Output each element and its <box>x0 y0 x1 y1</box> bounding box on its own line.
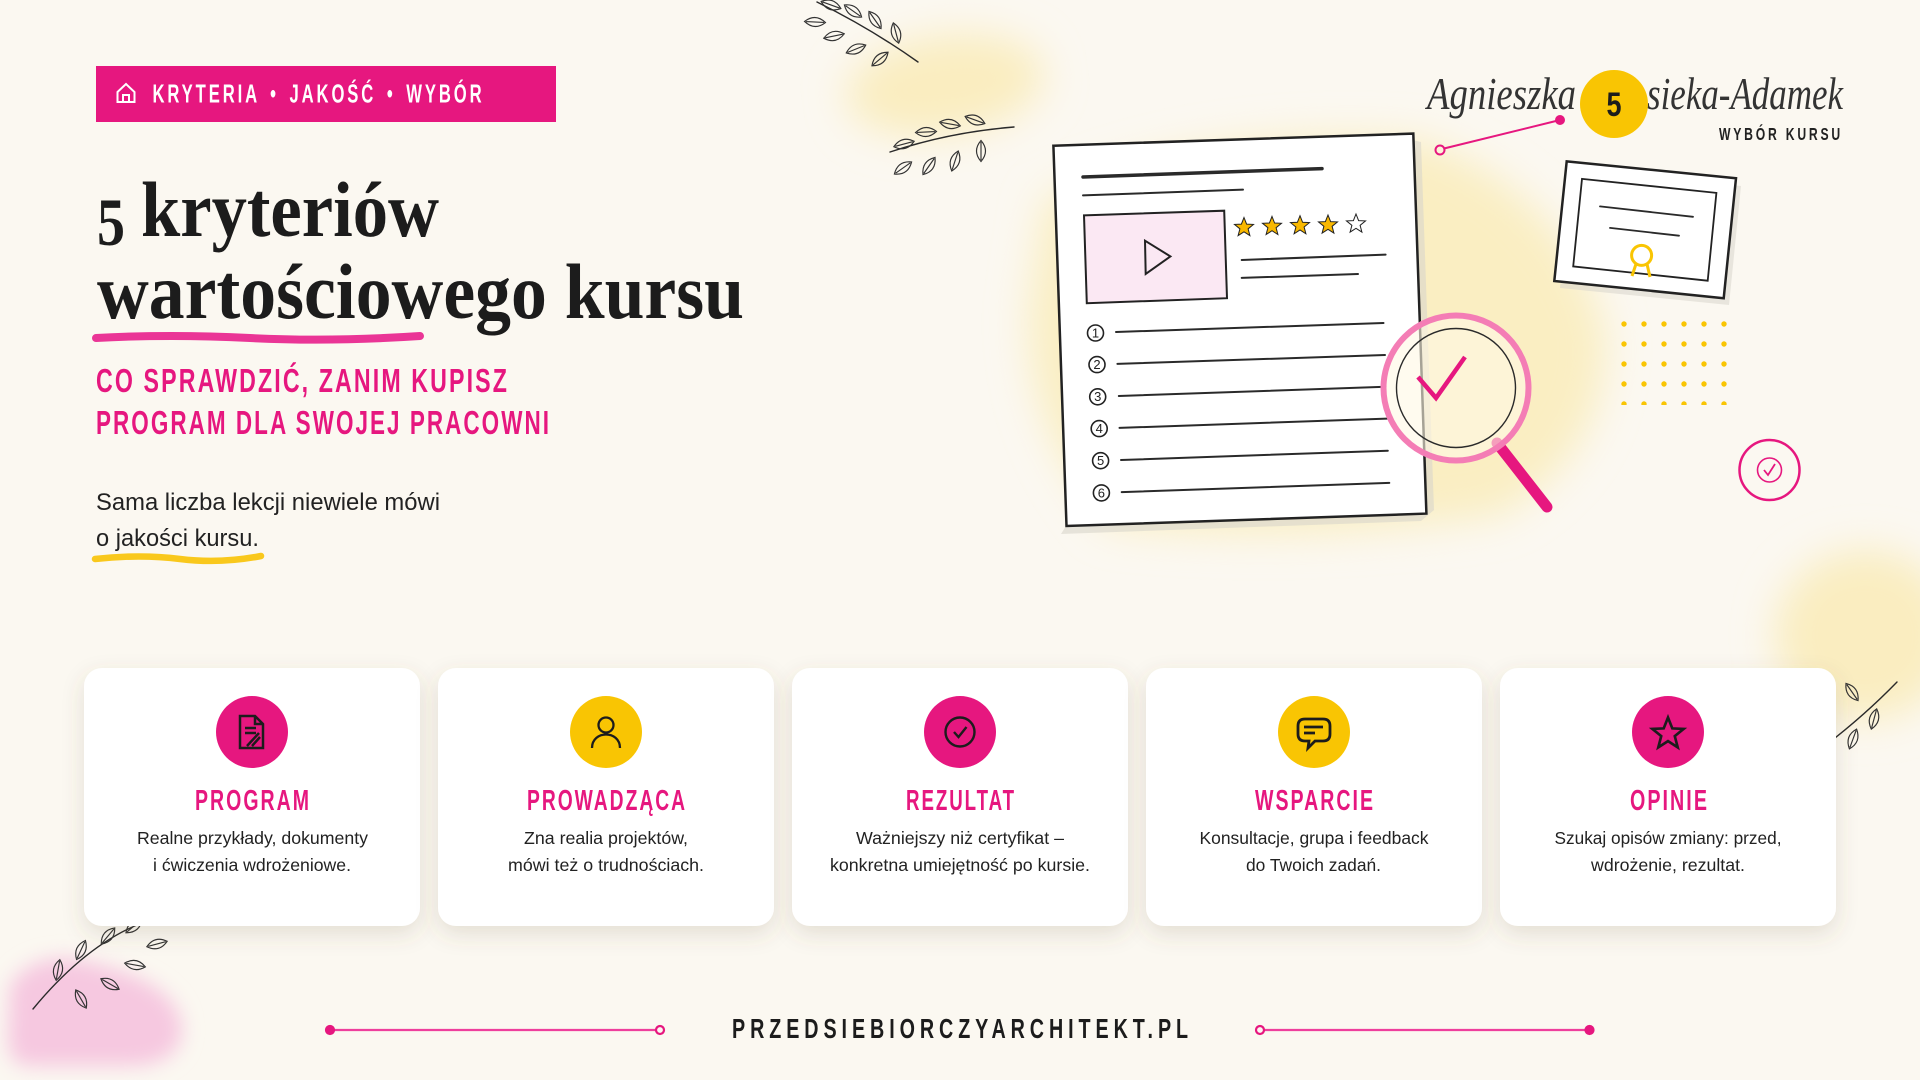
logo <box>1425 68 1844 119</box>
card: opinie <box>1500 668 1836 926</box>
description: Ważniejszy niż certyfikat – <box>856 828 1064 848</box>
connector <box>1436 116 1564 154</box>
footer line left <box>326 1026 664 1034</box>
icon: star <box>1632 696 1704 768</box>
footer url: PRZEDSIEBIORCZYARCHITEKT.PL <box>732 1013 1193 1044</box>
numbered list: 5 <box>1097 453 1104 468</box>
description <box>1554 828 1782 875</box>
branch: top upper <box>804 0 918 69</box>
icon: chat <box>1278 696 1350 768</box>
description: Realne przykłady, dokumenty <box>137 828 368 848</box>
description: konkretna umiejętność po kursie. <box>830 855 1090 875</box>
dots pattern <box>1621 321 1727 407</box>
blob: right yellow <box>1775 550 1920 720</box>
description <box>830 828 1090 875</box>
numbered list: 6 <box>1098 486 1105 500</box>
branch: right <box>1826 681 1897 750</box>
icon: check <box>924 696 996 768</box>
rating stars <box>1234 214 1366 236</box>
numbered list: 3 <box>1094 389 1101 404</box>
document shadow <box>1061 140 1434 534</box>
subtitle: CO SPRAWDZIĆ, ZANIM KUPISZ <box>96 362 509 399</box>
description: Zna realia projektów, <box>524 828 688 848</box>
numbered list <box>1088 323 1389 501</box>
description <box>1200 828 1429 875</box>
logo subtitle: WYBÓR KURSU <box>1719 123 1843 144</box>
subtitle: PROGRAM DLA SWOJEJ PRACOWNI <box>96 404 551 441</box>
video thumbnail <box>1084 211 1227 303</box>
badge <box>96 66 556 122</box>
card: rezultat <box>792 668 1128 926</box>
number badge: 5 <box>1606 86 1622 124</box>
title <box>97 166 744 335</box>
seal <box>1632 245 1652 277</box>
check <box>1418 357 1465 398</box>
footer line right <box>1256 1026 1594 1034</box>
description <box>508 828 704 875</box>
numbered list: 2 <box>1093 357 1101 372</box>
title: 5 <box>97 184 125 260</box>
description: do Twoich zadań. <box>1246 855 1381 875</box>
icon: circled check <box>1740 440 1800 500</box>
title: kryteriów <box>141 166 439 253</box>
icon: person <box>570 696 642 768</box>
blob: large yellow behind document <box>1029 138 1605 533</box>
description: wdrożenie, rezultat. <box>1590 855 1745 875</box>
subtitle <box>96 362 551 441</box>
heading: WSPARCIE <box>1255 785 1375 817</box>
intro underline <box>95 556 261 561</box>
card: program <box>84 668 420 926</box>
description: mówi też o trudnościach. <box>508 855 704 875</box>
number badge <box>1580 70 1648 138</box>
numbered list: 4 <box>1096 421 1103 436</box>
heading lines <box>1083 169 1322 195</box>
logo: sieka-Adamek <box>1647 68 1844 119</box>
blob: top yellow <box>839 22 1051 148</box>
lens <box>1384 316 1528 460</box>
inner ring <box>1396 328 1516 448</box>
blob: bottom-left pink <box>8 958 182 1066</box>
handle <box>1497 443 1547 507</box>
certificate <box>1554 161 1741 305</box>
document page <box>1053 134 1426 526</box>
magnifier <box>1384 316 1547 507</box>
branch: bottom left <box>33 916 168 1010</box>
badge text: KRYTERIA • JAKOŚĆ • WYBÓR <box>152 78 484 108</box>
description: i ćwiczenia wdrożeniowe. <box>153 855 351 875</box>
logo: Agnieszka <box>1425 68 1576 119</box>
icon: home <box>118 84 134 102</box>
heading: PROGRAM <box>195 785 311 817</box>
card: wsparcie <box>1146 668 1482 926</box>
title: wartościowego kursu <box>97 248 744 335</box>
description <box>137 828 368 875</box>
description: Konsultacje, grupa i feedback <box>1200 828 1429 848</box>
title underline <box>96 336 420 340</box>
description: Szukaj opisów zmiany: przed, <box>1554 828 1782 848</box>
heading: OPINIE <box>1630 785 1709 817</box>
intro text <box>96 489 440 552</box>
intro text: Sama liczba lekcji niewiele mówi <box>96 489 440 516</box>
card: prowadzaca <box>438 668 774 926</box>
branch: top lower <box>890 112 1014 178</box>
heading: REZULTAT <box>906 785 1016 817</box>
document illustration <box>1053 134 1434 534</box>
numbered list: 1 <box>1092 326 1099 340</box>
rating lines <box>1242 255 1386 278</box>
icon: document <box>216 696 288 768</box>
intro text: o jakości kursu. <box>96 525 259 552</box>
heading: PROWADZĄCA <box>527 785 687 817</box>
